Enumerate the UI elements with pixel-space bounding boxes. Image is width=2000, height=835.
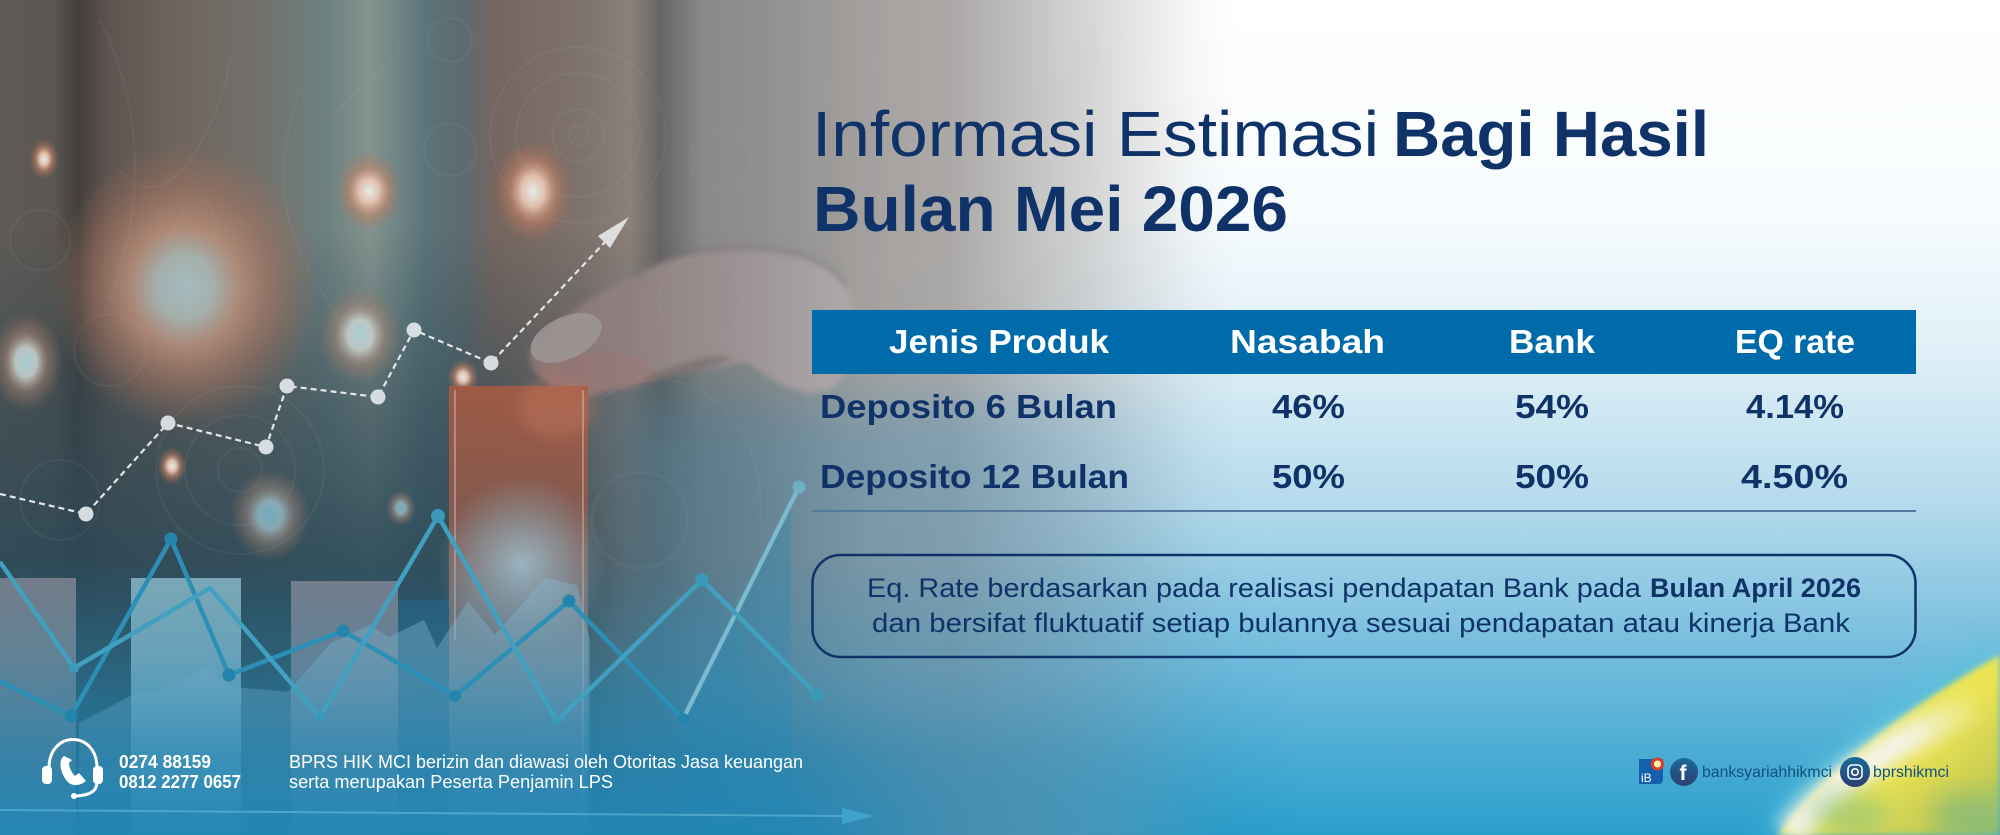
corner arc: white and yellow: [1760, 640, 2000, 835]
wooden blocks: [0, 378, 594, 835]
note box: Eq. Rate berdasarkan pada realisasi pendapatan Bank pada: [867, 573, 1642, 603]
phone numbers: 0812 2277 0657: [119, 772, 241, 792]
row: deposito 6 bulan: 4.14%: [1746, 388, 1844, 425]
phone numbers: 0274 88159: [119, 752, 211, 772]
social: facebook: [1670, 758, 1832, 786]
table header: Bank: [1509, 323, 1596, 360]
mandala line pattern: [10, 18, 934, 568]
social: instagram: bprshikmci: [1873, 764, 1949, 781]
row: deposito 12 bulan: 50%: [1272, 458, 1345, 495]
blue overlay at bottom: [0, 580, 1189, 835]
icon: iB logo: iB: [1641, 771, 1652, 785]
table header: [812, 310, 1916, 374]
row: deposito 6 bulan: 46%: [1272, 388, 1345, 425]
title: Bagi Hasil: [1393, 98, 1709, 170]
white glow over red block: [437, 475, 607, 655]
row: deposito 12 bulan: 50%: [1515, 458, 1589, 495]
row: deposito 12 bulan: Deposito 12 Bulan: [820, 458, 1129, 495]
line chart: [0, 480, 824, 726]
title: Bulan Mei 2026: [813, 173, 1288, 245]
social: facebook: f: [1680, 762, 1688, 785]
note box: dan bersifat fluktuatif setiap bulannya sesuai pendapatan atau kinerja Bank: [872, 608, 1851, 638]
social: facebook: banksyariahhikmci: [1702, 764, 1832, 781]
table header: Jenis Produk: [889, 323, 1110, 360]
row: deposito 12 bulan: [820, 458, 1848, 495]
legal notice: BPRS HIK MCI berizin dan diawasi oleh Otoritas Jasa keuangan: [289, 752, 803, 772]
table header: Nasabah: [1230, 323, 1385, 360]
icon: iB logo: [1639, 758, 1664, 785]
title: Informasi Estimasi: [812, 98, 1379, 170]
row: deposito 6 bulan: 54%: [1515, 388, 1589, 425]
table header: EQ rate: [1735, 323, 1855, 360]
background photo: hand placing blocks: [0, 0, 1300, 835]
legal notice: [289, 752, 803, 792]
title: [812, 98, 1709, 245]
lens glow lights: [0, 138, 573, 561]
note box: Bulan April 2026: [1650, 573, 1861, 603]
legal notice: serta merupakan Peserta Penjamin LPS: [289, 772, 613, 792]
dark teal series: [0, 480, 806, 725]
table: bagi hasil: [812, 310, 1916, 495]
row: deposito 12 bulan: 4.50%: [1741, 458, 1848, 495]
bottom arrow line: [0, 808, 875, 824]
row: deposito 6 bulan: Deposito 6 Bulan: [820, 388, 1117, 425]
light teal series: [0, 509, 824, 726]
row: deposito 6 bulan: [820, 388, 1844, 425]
note box: [812, 555, 1916, 657]
phone numbers: [119, 752, 241, 792]
icon: headset phone: [42, 740, 103, 799]
dashed growth arrow: [0, 217, 629, 522]
area chart mountains: [79, 500, 791, 835]
red block: [449, 378, 594, 835]
social: instagram: [1840, 757, 1949, 787]
